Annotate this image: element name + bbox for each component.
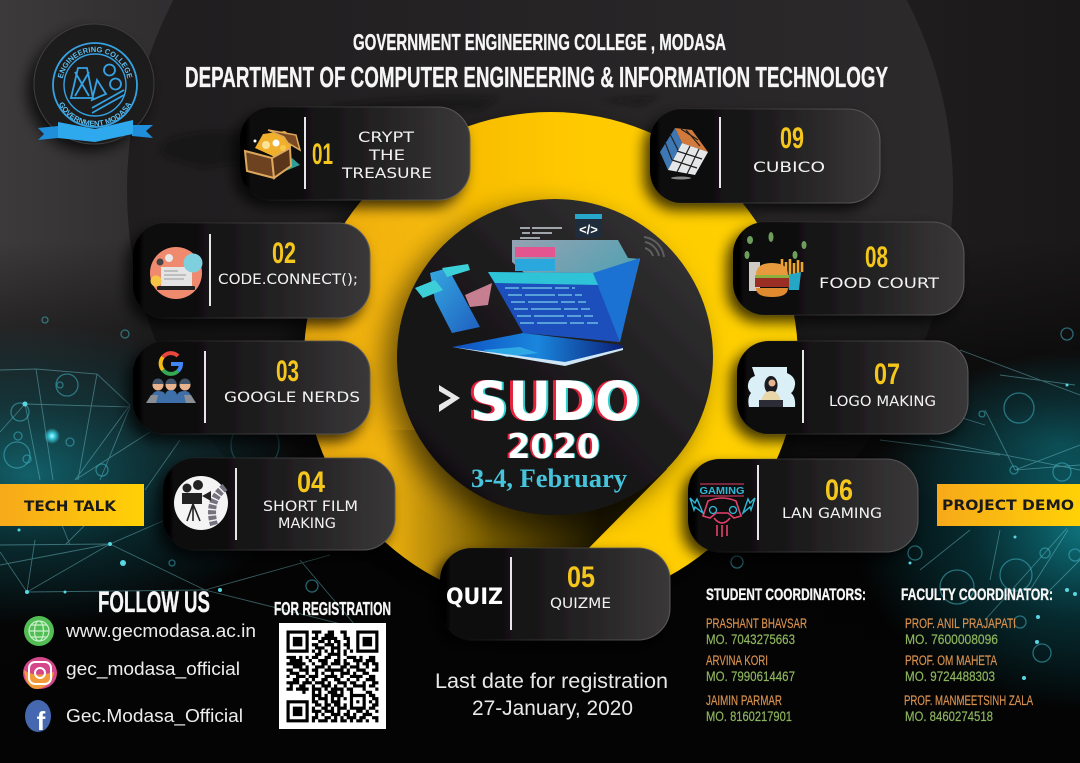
illustration: laptop: [415, 214, 664, 366]
faculty coordinators: MO. 7600008096: [905, 632, 998, 647]
student coordinators: JAIMIN PARMAR: [706, 693, 782, 708]
follow us heading: FOLLOW US: [98, 586, 210, 619]
code tag: </>: [579, 222, 598, 237]
student coordinators: PRASHANT BHAVSAR: [706, 616, 807, 631]
panel: 05 quizme: QUIZME: [550, 596, 611, 612]
panel: 05 quizme: [440, 548, 670, 640]
panel: 04 short film: MAKING: [278, 516, 336, 532]
tag: tech talk: [0, 484, 144, 526]
panel: 09 cubico: 09: [780, 122, 804, 155]
panel: 03 google nerds: GOOGLE NERDS: [224, 390, 360, 406]
icon: designer: [748, 367, 795, 407]
panel: 02 code connect: [133, 223, 370, 318]
panel: 08 food court: [733, 222, 964, 315]
panel: 04 short film: [163, 458, 395, 550]
faculty coordinators: PROF. OM MAHETA: [905, 653, 997, 668]
folder: [512, 240, 640, 340]
panel: 01 crypt the treasure: TREASURE: [341, 166, 432, 182]
student coordinators: MO. 7043275663: [706, 632, 795, 647]
icon: rubik cube: [660, 128, 708, 180]
sudo title: 3-4, February: [471, 464, 627, 493]
icon: quiz: QUIZ: [446, 585, 503, 610]
icon: neon gamepad: GAMING: [700, 485, 744, 497]
tag: project demo: [937, 484, 1080, 526]
facebook row: [25, 700, 243, 736]
panel: 06 lan gaming: LAN GAMING: [782, 506, 882, 522]
student coordinators: ARVINA KORI: [706, 653, 768, 668]
registration deadline: [435, 670, 668, 720]
registration deadline: 27-January, 2020: [472, 697, 633, 720]
website row: [24, 616, 256, 646]
qr code: [279, 623, 386, 729]
icon: facebook: f: [37, 706, 46, 736]
panel: 01 crypt the treasure: [240, 107, 470, 200]
panel: 01 crypt the treasure: CRYPT: [358, 130, 414, 146]
code tag: [575, 214, 602, 238]
panel: 06 lan gaming: 06: [825, 474, 853, 507]
panel: 04 short film: 04: [297, 466, 325, 499]
panel: 01 crypt the treasure: THE: [368, 148, 405, 164]
website row: www.gecmodasa.ac.in: [65, 620, 256, 641]
icon: google team: [146, 353, 196, 403]
icon: film camera: [174, 476, 228, 530]
icon: burger and fries: [744, 232, 806, 297]
floating phone: [430, 268, 480, 333]
panel: 06 lan gaming: [688, 459, 918, 552]
prompt chevron: [439, 385, 460, 412]
college logo: GOVERNMENT MODASA: [60, 102, 132, 126]
facebook row: Gec.Modasa_Official: [66, 705, 243, 727]
student coordinators: STUDENT COORDINATORS:: [706, 585, 866, 604]
panel: 02 code connect: CODE.CONNECT();: [218, 272, 358, 288]
icon: neon gamepad: [690, 484, 755, 537]
panel: 09 cubico: CUBICO: [753, 160, 825, 176]
faculty coordinators: PROF. ANIL PRAJAPATI: [905, 616, 1016, 631]
panel: 04 short film: SHORT FILM: [263, 499, 358, 515]
network pattern: [0, 317, 1080, 680]
faculty coordinators: [901, 585, 1053, 724]
panel: 01 crypt the treasure: 01: [312, 138, 333, 171]
panel: 03 google nerds: [133, 341, 370, 434]
icon: instagram: [23, 657, 57, 689]
faculty coordinators: PROF. MANMEETSINH ZALA: [904, 693, 1033, 708]
college logo: ENGINEERING COLLEGE: [58, 46, 132, 78]
student coordinators: [706, 585, 866, 724]
icon: facebook: [25, 700, 51, 736]
panel: 08 food court: FOOD COURT: [819, 276, 939, 292]
panel: 03 google nerds: 03: [276, 355, 299, 388]
sudo title: 2020: [507, 427, 600, 467]
panel: 07 logo making: 07: [874, 358, 900, 391]
faculty coordinators: MO. 9724488303: [905, 669, 995, 684]
sudo title: SUDO: [470, 370, 640, 433]
heading: college name: GOVERNMENT ENGINEERING COLLEGE , MODASA: [353, 29, 726, 55]
sudo title: [439, 370, 640, 493]
faculty coordinators: MO. 8460274518: [905, 709, 993, 724]
icon: code laptop: [150, 247, 202, 299]
panel: 09 cubico: [650, 109, 880, 203]
screen: [593, 258, 640, 342]
central circle: [397, 199, 713, 515]
panel: 08 food court: 08: [865, 241, 888, 274]
icon: treasure chest: [245, 130, 300, 178]
yellow ring: [304, 112, 798, 620]
panel: 02 code connect: 02: [272, 237, 296, 270]
tag: tech talk: TECH TALK: [24, 499, 117, 515]
laptop base: [452, 333, 623, 365]
instagram row: gec_modasa_official: [66, 658, 240, 680]
for registration heading: FOR REGISTRATION: [274, 599, 391, 619]
student coordinators: MO. 8160217901: [706, 709, 792, 724]
student coordinators: MO. 7990614467: [706, 669, 795, 684]
panel: 05 quizme: 05: [567, 561, 595, 594]
instagram row: [23, 657, 240, 689]
icon: globe: [24, 616, 54, 646]
panel: 07 logo making: [737, 341, 968, 434]
tag: project demo: PROJECT DEMO: [942, 498, 1074, 514]
panel: 07 logo making: LOGO MAKING: [829, 394, 936, 410]
registration deadline: Last date for registration: [435, 670, 668, 693]
college logo: [22, 24, 154, 156]
